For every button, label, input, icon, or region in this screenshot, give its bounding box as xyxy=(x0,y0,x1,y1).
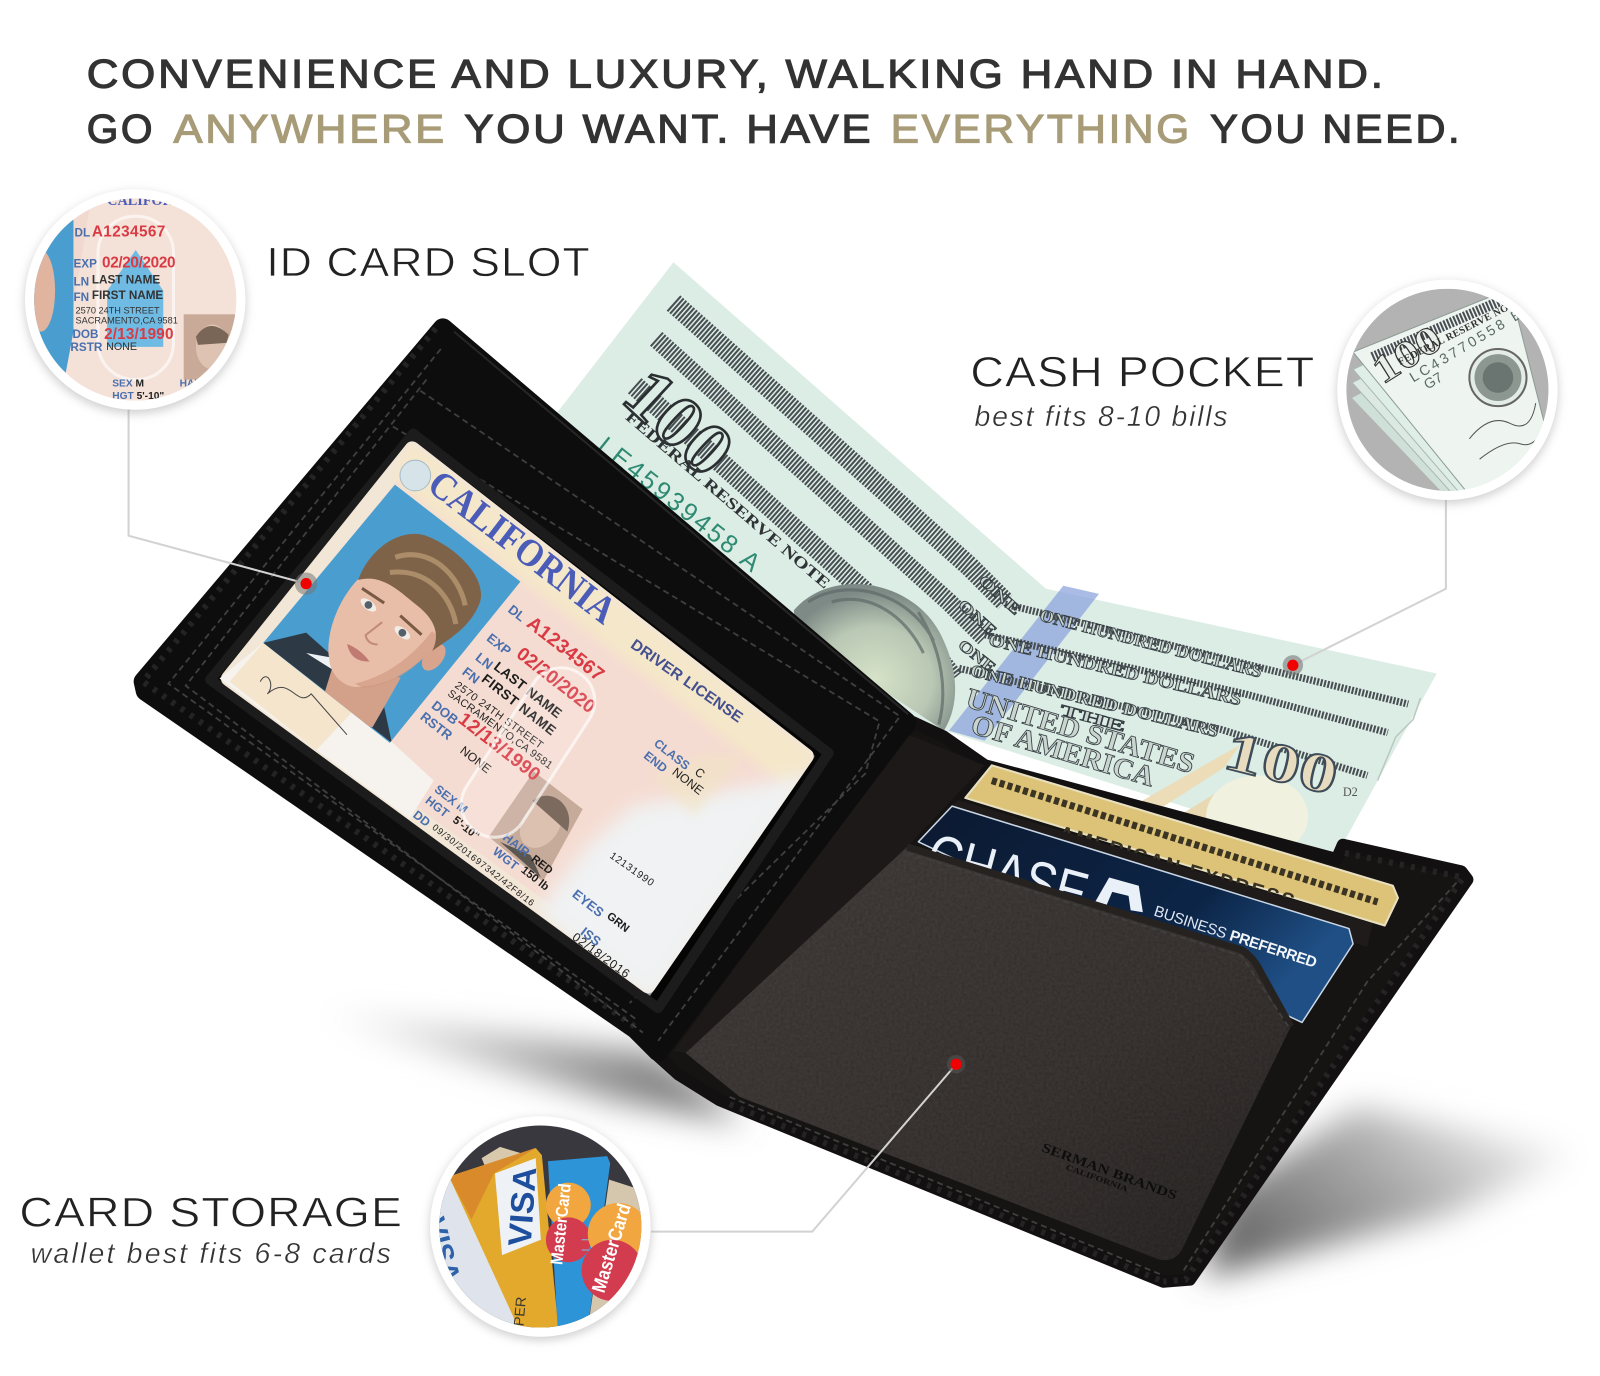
card text: HAIR xyxy=(500,830,533,860)
left wallet flap xyxy=(143,329,908,1051)
card text: NONE xyxy=(670,765,706,798)
card text: FIRST NAME xyxy=(479,671,559,738)
card divider strip xyxy=(944,800,1372,947)
brand stamp xyxy=(1040,1140,1179,1203)
lower tan area: 100 xyxy=(1219,720,1344,807)
card text: RSTR xyxy=(418,709,456,743)
federal reserve note: FEDERAL RESERVE NOTE xyxy=(622,408,833,592)
card text: SEX M xyxy=(432,782,470,817)
card text: CLASS xyxy=(651,736,693,773)
small photo xyxy=(489,771,583,882)
card text: 02/20/2020 xyxy=(513,643,600,717)
circle: cash detail: LC43770558 B xyxy=(1407,307,1525,386)
circle: card detail xyxy=(418,1116,653,1340)
circle: id card detail: FN xyxy=(73,291,89,304)
circle: card detail: MasterCard xyxy=(546,1182,575,1266)
card tints xyxy=(219,442,815,1005)
title: YOU WANT. HAVE xyxy=(464,106,873,151)
card text: C xyxy=(692,765,708,781)
signature xyxy=(260,677,347,735)
banknotes xyxy=(551,262,1437,857)
id card xyxy=(219,442,815,1005)
label: cash pocket: CASH POCKET xyxy=(970,349,1315,397)
circle: cash detail: G7 xyxy=(1421,370,1446,393)
brand stamp: CALIFORNIA xyxy=(1065,1163,1129,1194)
circle: id card detail: 2/13/1990 xyxy=(104,326,173,343)
denomination text: ONE xyxy=(954,596,1000,640)
window rim xyxy=(210,434,829,1008)
circle: id card detail: DOB xyxy=(72,328,99,341)
circle: card detail: PER xyxy=(512,1296,530,1327)
denomination text xyxy=(954,572,1264,793)
circle: card detail: MasterCard xyxy=(588,1201,636,1295)
card text: 2570 24TH STREET xyxy=(452,679,546,752)
chase card: PREFERRED xyxy=(1227,927,1319,972)
card text: WGT xyxy=(490,844,522,873)
circle: id card detail: 02/20/2020 xyxy=(102,254,176,271)
denomination text: ONE xyxy=(955,637,999,676)
title: ANYWHERE xyxy=(173,106,447,151)
circle: id card detail: RSTR xyxy=(70,341,103,354)
circle: id card detail: DL xyxy=(75,227,90,240)
circle: id card detail: HGT 5'-10" xyxy=(112,391,164,402)
front leather pocket xyxy=(686,847,1459,1275)
card text: EXP xyxy=(484,630,514,659)
wallet back panel and fold xyxy=(658,722,1467,1282)
leader: cash pocket xyxy=(1283,500,1446,676)
denomination text: OF AMERICA xyxy=(967,710,1159,793)
engraved bands xyxy=(635,303,1408,775)
circle: cash detail xyxy=(1337,280,1561,510)
card text: DD xyxy=(410,808,433,830)
circle: id card detail: LN xyxy=(73,276,89,289)
title: GO xyxy=(87,106,155,151)
denomination text: ONE HUNDRED DOLLARS xyxy=(968,661,1221,741)
card text: NONE xyxy=(457,743,494,776)
denomination text: UNITED STATES xyxy=(962,683,1198,780)
label: cash pocket xyxy=(970,349,1315,433)
card text: SACRAMENTO,CA 9581 xyxy=(445,688,555,772)
card text: 12131990 xyxy=(607,851,656,889)
numeral 100 left: 100 xyxy=(608,352,750,492)
card text: DRIVER LICENSE xyxy=(627,636,746,726)
circle: card detail: VISA xyxy=(501,1165,543,1247)
denomination text: THE xyxy=(1058,702,1128,736)
card text: DOB xyxy=(429,698,461,728)
card text: RED xyxy=(529,853,555,877)
label: card storage: wallet best fits 6-8 cards xyxy=(31,1238,391,1270)
denomination text: ONE HUNDRED DOLLARS xyxy=(1038,606,1264,682)
title: CONVENIENCE AND LUXURY, WALKING HAND IN HAND. xyxy=(87,51,1386,96)
lower tan area: D2 xyxy=(1343,785,1358,799)
blue security strip xyxy=(949,586,1099,741)
denomination text: ONE HUNDRED DOLLARS xyxy=(987,630,1243,709)
circle: id card detail: HAIR xyxy=(180,379,205,390)
circle: id card detail: LAST NAME xyxy=(92,274,160,287)
circle: id card detail: 2570 24TH STREET xyxy=(76,305,160,315)
card text: LN xyxy=(473,650,496,672)
card text: EYES xyxy=(570,886,607,920)
card text: FN xyxy=(459,664,483,687)
card text: 150 lb xyxy=(519,864,551,893)
title: YOU NEED. xyxy=(1210,106,1462,151)
wallet ground shadow xyxy=(306,1010,1582,1278)
label: card storage: CARD STORAGE xyxy=(19,1189,403,1236)
gold card: AMERICAN EXPRESS xyxy=(1056,822,1297,913)
card text xyxy=(410,462,746,981)
label: id card slot: ID CARD SLOT xyxy=(266,239,591,285)
title: EVERYTHING xyxy=(891,106,1192,151)
main photo xyxy=(263,485,520,755)
card text: END xyxy=(641,748,670,776)
card text: CALIFORNIA xyxy=(420,462,624,633)
serial number: LE45939458 A xyxy=(592,432,765,578)
card text: A1234567 xyxy=(522,612,608,686)
circle: cash detail: 100 xyxy=(1365,317,1450,392)
circle: id card detail: CALIFORNIA xyxy=(107,193,200,209)
chase card xyxy=(918,806,1353,1022)
circle: id card detail: SEX M xyxy=(112,379,144,390)
card text: HGT xyxy=(423,793,452,821)
label: cash pocket: best fits 8-10 bills xyxy=(974,401,1228,433)
chase card: BUSINESS xyxy=(1152,903,1229,942)
circle: id card detail: NONE xyxy=(106,341,137,353)
portrait xyxy=(794,584,955,731)
label: card storage xyxy=(19,1189,403,1270)
signature patch xyxy=(230,643,352,750)
card text: 12/13/1990 xyxy=(455,708,545,785)
circle: card detail: VISA xyxy=(418,1214,466,1287)
lower tan area xyxy=(1133,720,1358,857)
denomination text: ONE xyxy=(975,572,1024,619)
title xyxy=(87,51,1462,151)
brand stamp: SERMAN BRANDS xyxy=(1040,1140,1179,1203)
seal xyxy=(400,460,431,491)
circle: cash detail: FEDERAL RESERVE NO xyxy=(1396,303,1511,368)
chase card: CHASE xyxy=(920,820,1095,927)
leader: id card slot xyxy=(129,408,317,595)
circle: id card detail: EXP xyxy=(73,257,97,270)
leader: card storage xyxy=(651,1055,965,1232)
card text: ISS xyxy=(578,924,604,949)
card text: LAST NAME xyxy=(491,659,565,721)
circle: id card detail xyxy=(25,189,245,413)
card text: 02/18/2016 xyxy=(570,930,633,981)
circle: id card detail: FIRST NAME xyxy=(92,289,163,302)
card text: GRN xyxy=(604,910,631,935)
circle: id card detail: A1234567 xyxy=(92,224,165,241)
gold card xyxy=(965,765,1398,925)
circle: id card detail: SACRAMENTO,CA 9581 xyxy=(76,315,178,325)
card text: DL xyxy=(505,602,528,624)
card text: 5'-10" xyxy=(450,814,482,843)
hologram xyxy=(449,655,607,850)
card text: 09/30/201697342/42F8/16 xyxy=(430,822,536,908)
